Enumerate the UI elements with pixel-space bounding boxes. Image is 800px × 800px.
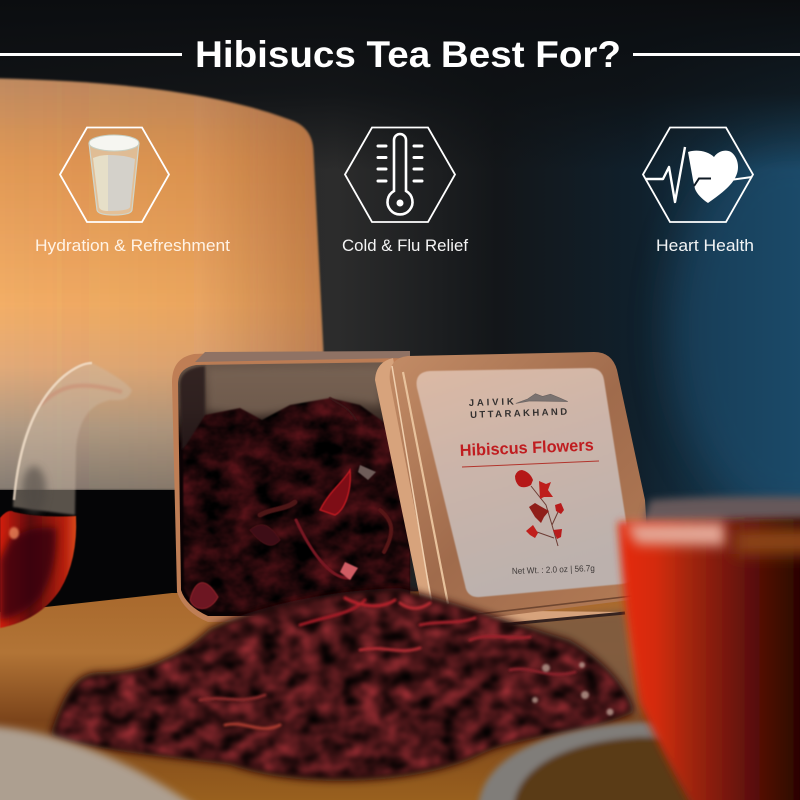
cup pink highlight (626, 522, 726, 546)
tin interior (178, 362, 410, 616)
label title: Hibiscus Flowers (459, 436, 594, 460)
lamp shade (0, 78, 323, 490)
lid lower band (445, 596, 632, 618)
icon: glass of water (89, 135, 139, 215)
title rule right (633, 53, 800, 56)
lid highlights (392, 366, 432, 606)
lid back edge (375, 358, 625, 629)
title rule left (0, 53, 182, 56)
open tin with dried hibiscus (172, 351, 410, 622)
pile texture (55, 592, 630, 777)
spilled hibiscus pile (50, 588, 634, 781)
spout (13, 363, 132, 515)
label (417, 368, 634, 597)
tin lid (375, 352, 650, 630)
lid shadow lip (446, 613, 625, 630)
label: Hydration & Refreshment (35, 236, 230, 255)
label brand mountain (515, 393, 568, 403)
cup orange band (734, 528, 800, 554)
dark lamp base area (0, 490, 180, 615)
hexagon (643, 128, 753, 222)
cup body (618, 518, 800, 800)
lid outer (390, 352, 650, 622)
hexagon (60, 128, 169, 222)
item: hydration (35, 128, 230, 255)
foreground saucer left (0, 725, 200, 800)
pile petals (200, 598, 575, 729)
label: Heart Health (656, 236, 754, 255)
tea liquid (0, 511, 76, 628)
icon: heart with pulse (645, 147, 752, 203)
label: Cold & Flu Relief (342, 236, 468, 255)
foreground saucer center (478, 722, 720, 800)
item: cold and flu (342, 128, 468, 255)
label flower illustration (515, 470, 564, 546)
back wall highlight (207, 366, 382, 415)
hexagon (345, 128, 455, 222)
pale flecks (532, 662, 614, 716)
label brand: Jaivik Uttarakhand (469, 393, 568, 421)
top rim band (195, 351, 410, 362)
lid inner bevel (403, 372, 448, 604)
flower mass (183, 398, 410, 612)
wooden table (0, 590, 800, 800)
label brand: Jaivik Uttarakhand: JAIVIK (469, 396, 514, 409)
pile shadow (50, 588, 634, 781)
label rule (462, 461, 599, 467)
tin rim (172, 352, 410, 622)
left inner wall (180, 366, 205, 450)
petal highlights (190, 398, 391, 609)
title: Hibisucs Tea Best For? (195, 34, 621, 75)
label net weight: Net Wt. : 2.0 oz | 56.7g (512, 563, 595, 576)
item: heart health (643, 128, 754, 255)
label brand: Jaivik Uttarakhand: UTTARAKHAND (470, 407, 567, 421)
cup glass rim (640, 496, 800, 535)
icon: thermometer (378, 134, 422, 214)
glass teapot (0, 363, 132, 628)
foreground red tea cup (618, 496, 800, 800)
